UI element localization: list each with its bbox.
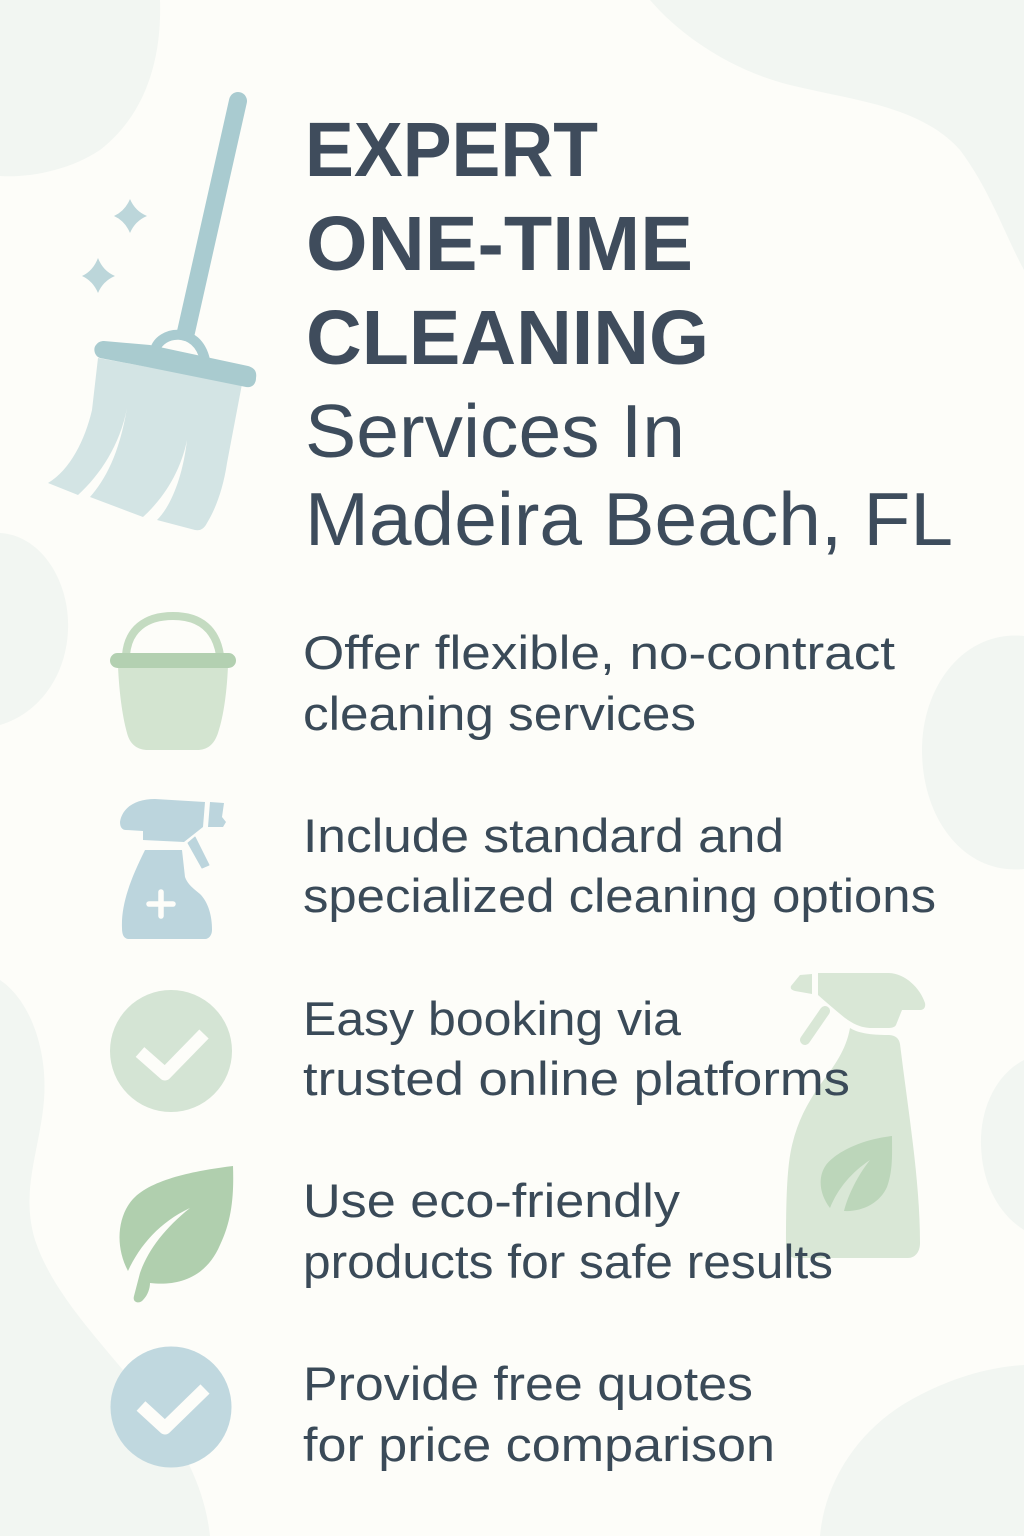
item: easy booking	[303, 992, 850, 1105]
feature list	[303, 626, 936, 1471]
bucket handle	[126, 616, 220, 655]
broom bar	[94, 341, 256, 387]
spray nozzle	[208, 802, 226, 827]
icon: blue check circle	[110, 1346, 232, 1468]
icon: bucket	[110, 616, 236, 750]
spray trigger	[188, 837, 209, 868]
plus sign	[149, 892, 173, 916]
item: cleaning options: Include standard and	[303, 809, 784, 862]
broom collar	[155, 335, 205, 360]
bottle body	[786, 1028, 920, 1258]
item: free quotes	[303, 1357, 775, 1471]
title: Services In	[305, 389, 685, 473]
broom bristles	[48, 358, 242, 530]
item: flexible services: cleaning services	[303, 687, 696, 740]
item: easy booking: Easy booking via	[303, 992, 682, 1045]
item: eco-friendly: Use eco-friendly	[303, 1174, 681, 1227]
bucket rim	[110, 653, 236, 668]
bottle head	[818, 973, 925, 1028]
title: CLEANING	[306, 295, 709, 381]
bucket body	[118, 666, 228, 750]
spray head	[120, 799, 205, 842]
sparkle	[82, 258, 115, 293]
item: eco-friendly: products for safe results	[303, 1235, 833, 1288]
item: flexible services: Offer flexible, no-contract	[303, 626, 895, 679]
spray body	[122, 850, 212, 939]
bottle nozzle	[791, 974, 812, 994]
item: easy booking: trusted online platforms	[303, 1052, 850, 1105]
item: free quotes: for price comparison	[303, 1418, 775, 1471]
sparkle	[114, 199, 147, 233]
broom handle	[186, 101, 238, 332]
icon: leaf	[120, 1166, 233, 1302]
title	[305, 107, 953, 561]
bottle leaf	[821, 1136, 892, 1211]
bottle trigger	[805, 1011, 825, 1040]
icon: green check circle	[110, 990, 232, 1112]
item: eco-friendly	[303, 1174, 833, 1288]
title: ONE-TIME	[306, 201, 693, 287]
icon: small spray bottle	[120, 799, 226, 939]
item: free quotes: Provide free quotes	[303, 1357, 753, 1410]
title: Madeira Beach, FL	[305, 477, 953, 561]
title: EXPERT	[305, 107, 598, 193]
icon: large spray bottle	[786, 973, 925, 1258]
item: cleaning options	[303, 809, 936, 922]
item: cleaning options: specialized cleaning options	[303, 869, 936, 922]
item: flexible services	[303, 626, 895, 740]
icon: broom with sparkles	[48, 101, 256, 530]
